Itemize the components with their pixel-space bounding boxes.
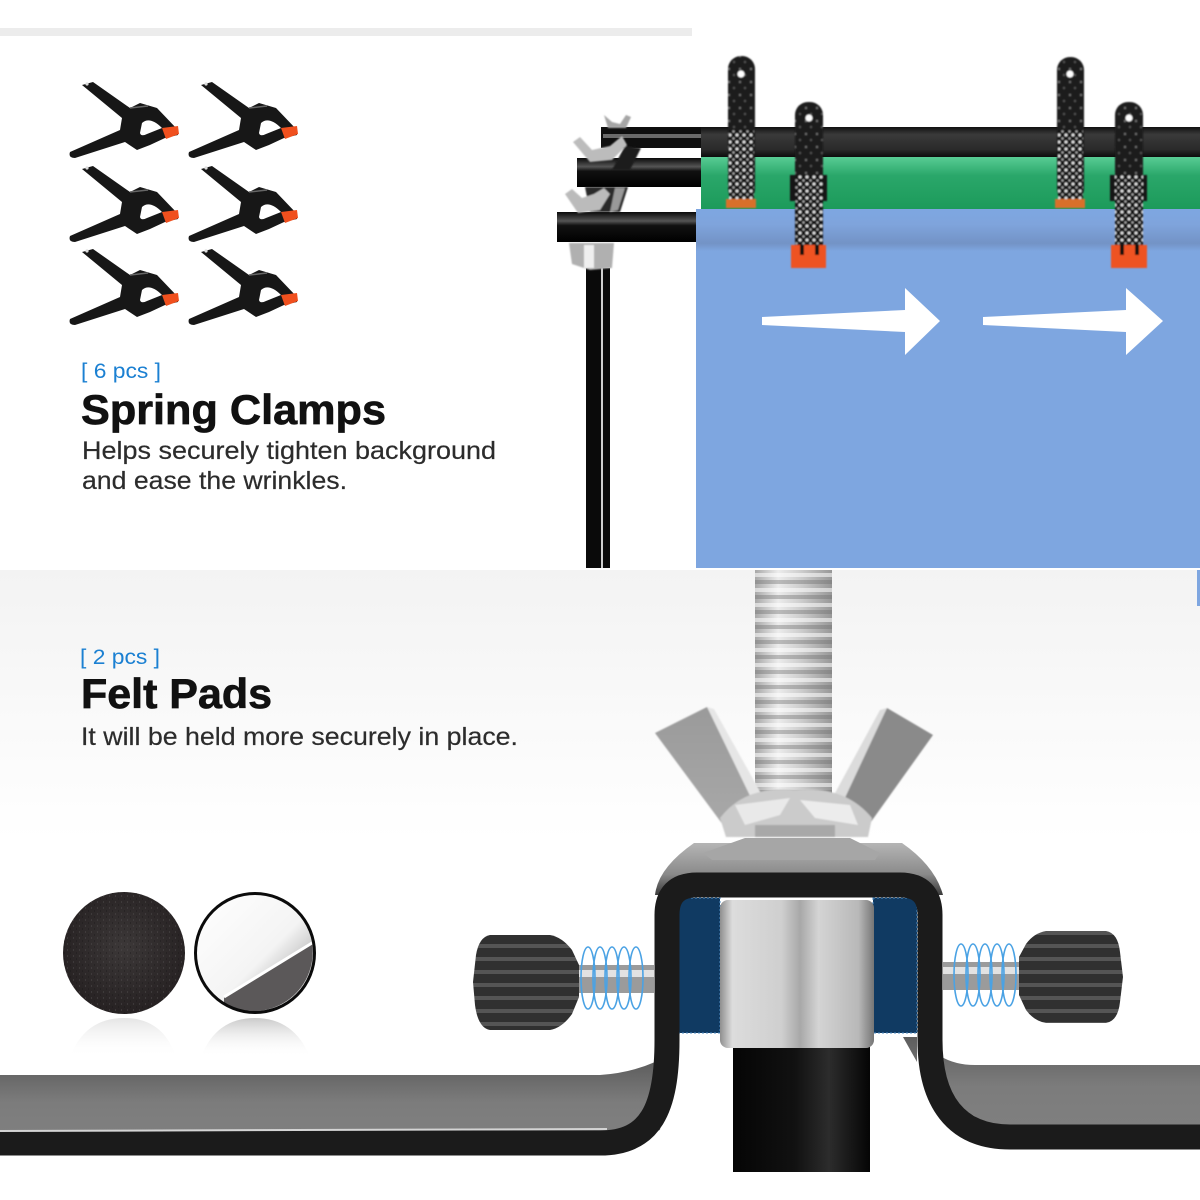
- description: spring clamps: and ease the wrinkles.: [82, 467, 347, 495]
- clamp on backdrop: second: [790, 102, 827, 268]
- photo: background stand with clamped backdrops: [557, 56, 1200, 568]
- felt pads inside bracket: [679, 898, 917, 1033]
- silver collar: [720, 900, 874, 1048]
- blue backdrop: [696, 209, 1200, 568]
- description: felt pads: It will be held more securely in place.: [81, 723, 518, 751]
- left base plate: [0, 1062, 668, 1143]
- arrow: second: [983, 288, 1163, 355]
- bracket body: [0, 885, 1200, 1143]
- right base plate: [903, 1037, 1200, 1137]
- left rim highlight: [0, 1129, 607, 1131]
- arrow: first: [762, 288, 940, 355]
- quantity tag: 6 pcs: [ 6 pcs ]: [81, 360, 161, 383]
- clamp on rod: third: [1055, 57, 1085, 208]
- clamp on backdrop: fourth: [1110, 102, 1147, 268]
- reflection: peeled pad: [201, 1018, 310, 1057]
- panel: felt pads background: [0, 570, 1200, 840]
- wing nut: [655, 707, 933, 837]
- quantity tag: 2 pcs: [ 2 pcs ]: [80, 646, 160, 669]
- photo: bracket assembly: [0, 570, 1200, 1172]
- right spring coils: [954, 944, 1016, 1006]
- clamp on rod: first: [726, 56, 756, 208]
- left knob and screw: [473, 935, 654, 1030]
- icon group: six spring clamps: [70, 82, 298, 325]
- green backdrop: [701, 157, 1200, 210]
- description: spring clamps: Helps securely tighten background: [82, 437, 496, 465]
- reflection: black pad: [70, 1018, 176, 1057]
- heading: spring clamps: Spring Clamps: [81, 386, 386, 433]
- heading: felt pads: Felt Pads: [81, 670, 272, 717]
- icon: felt pad with peeled backing: [196, 894, 314, 1057]
- left spring coils: [581, 947, 643, 1009]
- wing nuts on crossbars: [565, 115, 641, 270]
- crossbar rods: [557, 127, 1200, 242]
- text block: felt pads: [80, 646, 518, 751]
- lower pole: [733, 1040, 870, 1172]
- text block: spring clamps: [81, 360, 496, 495]
- bracket top face: [655, 843, 943, 895]
- vertical stand pole: [586, 268, 610, 568]
- right knob and screw: [943, 931, 1123, 1023]
- blue backdrop edge: [1197, 570, 1200, 606]
- bolt: [755, 570, 832, 800]
- bolt seat: [703, 838, 880, 860]
- top divider bar: [0, 28, 692, 36]
- icon: black felt pad: [63, 892, 185, 1057]
